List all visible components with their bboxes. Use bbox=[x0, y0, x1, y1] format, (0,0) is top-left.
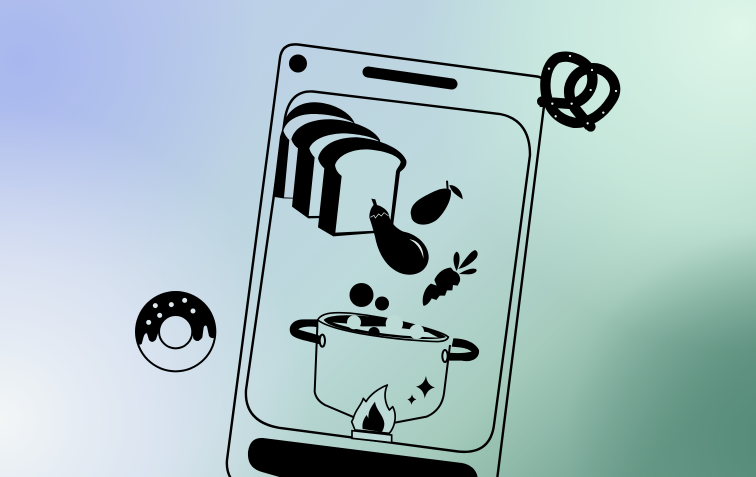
icon: eggplant bbox=[369, 199, 429, 275]
icon: bread slices bbox=[273, 102, 406, 236]
front slice bbox=[318, 137, 406, 236]
phone camera dot bbox=[289, 54, 307, 72]
icon: falling round vegetables bbox=[350, 283, 389, 310]
pot rim and food bbox=[318, 313, 448, 342]
icon: donut bbox=[136, 292, 215, 371]
bottom button bar bbox=[248, 438, 478, 477]
back slice bbox=[273, 102, 357, 200]
flame bbox=[352, 385, 395, 433]
middle slice bbox=[291, 119, 383, 218]
phone speaker pill bbox=[368, 72, 452, 84]
phone screen bbox=[246, 91, 530, 452]
burner bbox=[352, 431, 392, 443]
phone outline bbox=[227, 44, 546, 477]
icon: pear bbox=[411, 181, 463, 225]
sparkles bbox=[407, 376, 435, 405]
icon: cooking pot on burner bbox=[290, 313, 479, 443]
pot handles bbox=[290, 319, 479, 362]
pot body bbox=[315, 327, 450, 423]
icon: carrot bbox=[423, 250, 478, 306]
icon: pretzel bbox=[537, 55, 617, 132]
